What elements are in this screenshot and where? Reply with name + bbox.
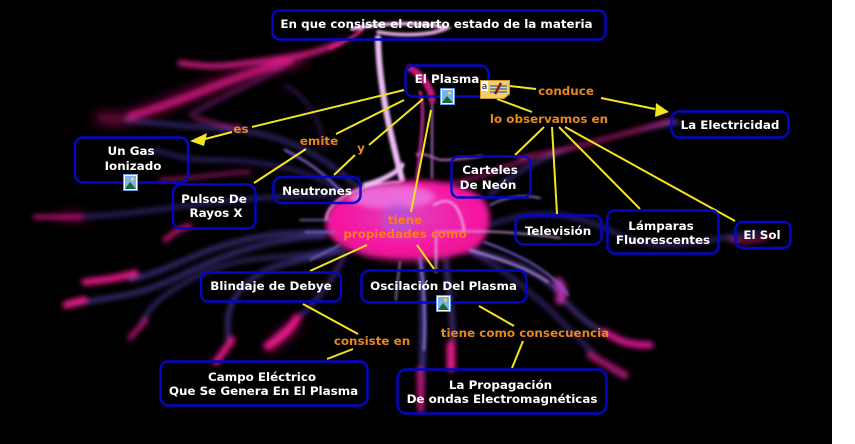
linking phrase: conduce: conduce	[538, 84, 594, 98]
node: Carteles De Neon: De Neón	[460, 178, 516, 192]
linking phrase: tiene propiedades como: propiedades como	[343, 227, 467, 241]
linking phrase: lo observamos en: lo observamos en	[490, 112, 608, 126]
node: Television	[516, 216, 602, 244]
stem and top loop	[330, 24, 482, 180]
node: Blindaje de Debye	[201, 272, 341, 302]
linking phrase: consiste en: consiste en	[334, 334, 410, 348]
node: La Propagacion: De ondas Electromagnéticas	[407, 392, 597, 406]
connector: to La Electricidad via conduce	[510, 86, 669, 117]
node: Television: Televisión	[525, 224, 591, 238]
node: La Electricidad	[672, 112, 788, 138]
connector: El Plasma to Un Gas Ionizado via es	[190, 90, 404, 146]
connector: to observation examples	[497, 99, 735, 221]
node: El Sol	[736, 222, 790, 248]
node: El Plasma: El Plasma	[415, 72, 479, 86]
node: Campo Electrico: Que Se Genera En El Plasma	[169, 384, 358, 398]
icon: image on Oscilacion	[436, 296, 450, 312]
node: El Plasma	[406, 66, 488, 96]
node: Campo Electrico	[160, 362, 368, 406]
node: La Propagacion: La Propagación	[449, 378, 552, 392]
node: Oscilacion Del Plasma: Oscilación Del Plasma	[370, 279, 517, 293]
node: Carteles De Neon	[452, 156, 530, 198]
linking phrase: tiene propiedades como: tiene	[388, 213, 422, 227]
icon: annotation note	[480, 80, 510, 98]
node: Pulsos De Rayos X	[173, 184, 256, 228]
icon: annotation note: a	[482, 82, 487, 92]
title box	[272, 10, 606, 40]
icon: image on El Plasma	[440, 88, 454, 104]
node: El Sol: El Sol	[743, 228, 781, 242]
node: Campo Electrico: Campo Eléctrico	[208, 370, 316, 384]
connector: Oscilacion to Propagacion	[479, 306, 523, 368]
linking phrase: tiene como consecuencia: tiene como consecuencia	[441, 326, 609, 340]
connector: propiedades to Blindaje and Oscilacion	[310, 245, 434, 271]
node: Un Gas Ionizado: Ionizado	[105, 159, 161, 173]
node: Pulsos De Rayos X: Rayos X	[189, 206, 243, 220]
node: Carteles De Neon: Carteles	[462, 163, 518, 177]
node: Neutrones	[274, 177, 360, 203]
connector: Blindaje to Campo	[303, 304, 358, 359]
icon: image on Un Gas	[124, 174, 138, 190]
node: Lamparas Fluorescentes: Lámparas	[628, 219, 694, 233]
node: Oscilacion Del Plasma	[362, 270, 526, 302]
linking phrase: emite: emite	[300, 134, 338, 148]
node: Un Gas Ionizado	[75, 138, 188, 182]
linking phrase: y: y	[357, 141, 365, 155]
node: La Electricidad: La Electricidad	[681, 118, 779, 132]
node: Un Gas Ionizado: Un Gas	[107, 144, 155, 158]
node: Lamparas Fluorescentes	[608, 210, 718, 254]
node: Blindaje de Debye: Blindaje de Debye	[210, 279, 332, 293]
connector: El Plasma to tiene propiedades	[411, 110, 431, 212]
node: Neutrones: Neutrones	[282, 184, 352, 198]
title box: En que consiste el cuarto estado de la materia	[280, 17, 593, 31]
connector: El Plasma to Neutrones via y	[334, 99, 423, 175]
node: Pulsos De Rayos X: Pulsos De	[181, 192, 247, 206]
node: Lamparas Fluorescentes: Fluorescentes	[616, 233, 710, 247]
plasma ball background image	[35, 24, 770, 410]
connector: El Plasma to Pulsos via emite	[254, 100, 404, 183]
linking phrase: es: es	[233, 122, 249, 136]
node: La Propagacion	[398, 370, 606, 414]
